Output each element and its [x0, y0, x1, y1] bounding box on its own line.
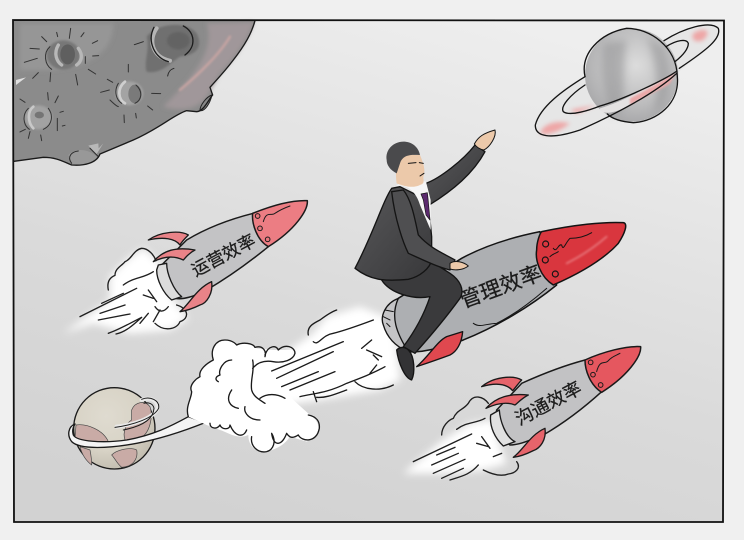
shirt and collar	[395, 178, 431, 230]
body	[496, 360, 602, 445]
fin: top	[148, 232, 188, 245]
hair	[386, 142, 420, 173]
nose cone	[536, 222, 626, 285]
trousers	[382, 257, 462, 353]
nozzle	[382, 298, 408, 352]
fin	[417, 332, 463, 367]
rocket: communication efficiency	[403, 347, 641, 480]
earth planet with ribbon	[69, 388, 205, 469]
jacket	[355, 187, 432, 280]
nose cone	[585, 347, 641, 392]
hand on rocket	[450, 262, 468, 270]
ribbon trail	[69, 417, 205, 447]
fin: bottom	[513, 428, 545, 457]
rocket label: 管理效率	[457, 261, 545, 313]
suit sleeve	[392, 190, 455, 270]
ringed planet	[533, 25, 719, 136]
exhaust smoke	[63, 248, 188, 334]
raised arm	[426, 145, 485, 205]
main rocket: management efficiency	[355, 130, 626, 380]
tie	[421, 193, 430, 220]
body	[394, 232, 557, 352]
rocket label: 沟通效率	[512, 378, 585, 429]
fin: bottom	[180, 282, 212, 312]
businessman	[355, 130, 495, 380]
raised hand	[474, 130, 495, 150]
nozzle	[157, 263, 182, 300]
rocket: operations efficiency	[63, 201, 307, 334]
shoe	[397, 347, 414, 380]
moon with craters	[13, 20, 255, 165]
nozzle	[490, 410, 515, 446]
exhaust smoke	[403, 397, 518, 480]
neck and face	[396, 155, 424, 187]
fin: top	[482, 377, 522, 391]
main exhaust cloud	[187, 307, 400, 452]
fin: middle	[486, 395, 528, 408]
rocket label: 运营效率	[188, 230, 259, 280]
fin: middle	[153, 249, 195, 262]
body	[161, 213, 268, 299]
nose cone	[253, 201, 307, 247]
